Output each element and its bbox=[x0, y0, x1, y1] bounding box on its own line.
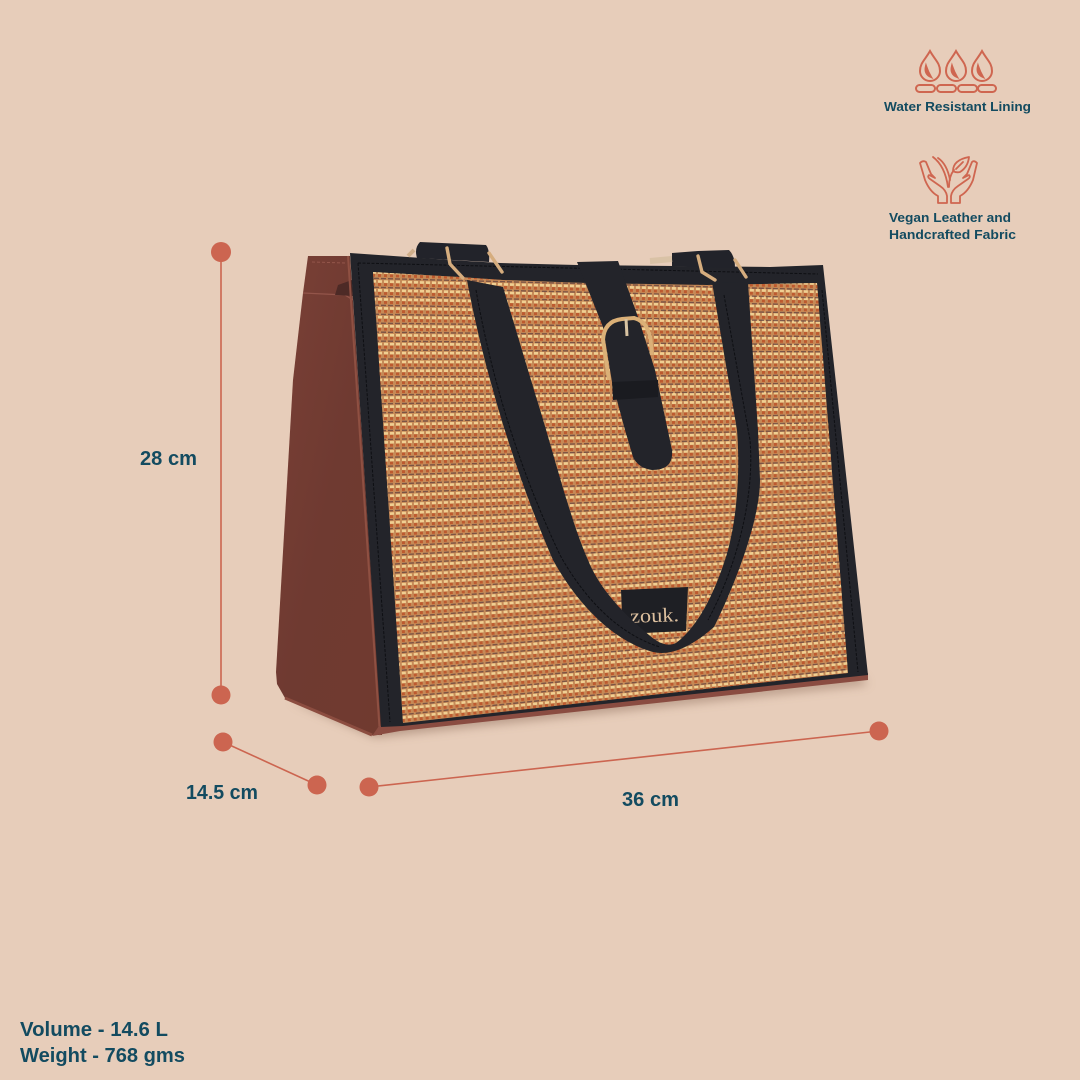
top handle loops bbox=[408, 242, 735, 268]
icon: water drops over lining bbox=[916, 51, 996, 92]
dimension: height 28 cm: 28 cm bbox=[140, 448, 197, 470]
label: vegan leather and handcrafted fabric: Handcrafted Fabric bbox=[889, 227, 1016, 242]
product photo: handbag bbox=[276, 242, 870, 737]
label: vegan leather and handcrafted fabric: Vegan Leather and bbox=[889, 210, 1011, 225]
specifications: volume and weight bbox=[20, 1019, 185, 1067]
gold rings bbox=[447, 248, 746, 280]
dimension: width 36 cm bbox=[360, 722, 888, 811]
bag base trim bbox=[372, 673, 868, 736]
dimension: height 28 cm bbox=[140, 242, 231, 704]
label: vegan leather and handcrafted fabric bbox=[889, 210, 1016, 242]
specifications: volume and weight: Volume - 14.6 L bbox=[20, 1019, 168, 1041]
dimension: width 36 cm: 36 cm bbox=[622, 789, 679, 811]
buckle keeper bbox=[612, 380, 658, 400]
brand label bbox=[621, 587, 688, 634]
front tab with buckle bbox=[577, 261, 672, 470]
border stitching bbox=[358, 263, 858, 722]
brand label: zouk. bbox=[630, 604, 679, 628]
black border frame bbox=[350, 253, 868, 727]
dimension: depth 14.5 cm: 14.5 cm bbox=[186, 782, 258, 804]
icon: hands holding leaf bbox=[920, 157, 977, 203]
label: water resistant lining: Water Resistant Lining bbox=[884, 99, 1031, 114]
shoulder handle strap bbox=[467, 280, 760, 653]
dimension: depth 14.5 cm bbox=[186, 732, 326, 804]
specifications: volume and weight: Weight - 768 gms bbox=[20, 1045, 185, 1067]
woven fabric panel bbox=[373, 272, 848, 723]
side gusset bbox=[276, 256, 382, 735]
strap stitching bbox=[476, 290, 751, 647]
ground shadow bbox=[290, 676, 868, 737]
gold buckle bbox=[603, 318, 652, 380]
